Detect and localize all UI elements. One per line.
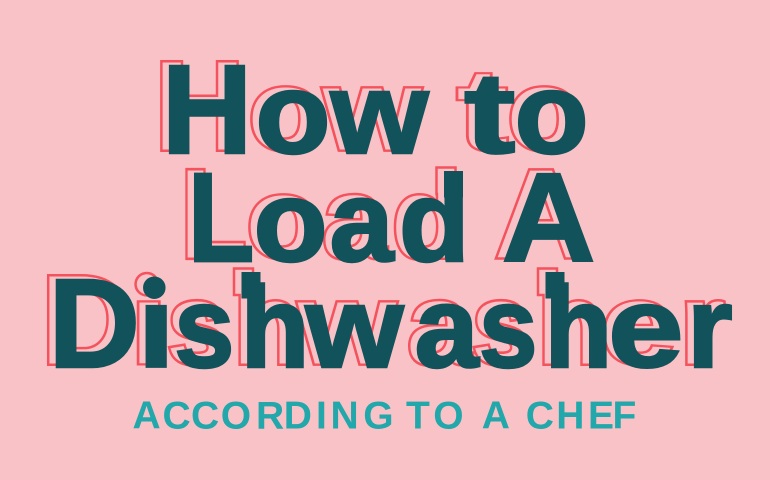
title outline shadow: h [537,259,605,388]
title: i [138,262,175,392]
title outline shadow: L [180,143,247,284]
title: h [544,263,612,391]
title: w [304,263,405,392]
title outline shadow: d [392,155,462,282]
title outline shadow: H [154,35,245,176]
title outline shadow: a [407,260,472,388]
title outline shadow: w [297,259,397,388]
infographic canvas [46,60,732,429]
title outline shadow: A [494,145,588,285]
title: t [464,48,516,177]
title outline shadow: s [167,259,227,388]
title outline shadow: e [600,259,676,388]
title outline shadow: s [167,259,227,388]
title: L [188,146,254,288]
title: e [608,263,684,391]
title outline shadow: h [537,259,605,388]
title outline shadow: t [456,45,508,174]
title: o [254,158,328,286]
title: h [240,264,310,392]
title: A [502,148,595,288]
title outline shadow: o [507,46,581,175]
title outline shadow: t [456,45,508,174]
title outline shadow: w [297,259,397,388]
title: r [687,263,733,392]
title: D [48,253,140,394]
title: o [514,50,589,178]
subtitle: ACCORDING TO A CHEF [132,394,636,438]
title outline shadow: i [130,259,168,388]
title outline shadow: a [322,154,387,282]
title outline shadow: L [180,143,247,284]
title: s [174,263,234,391]
title outline shadow: A [494,145,588,285]
title: o [255,49,331,178]
title outline shadow: w [322,45,422,174]
title [56,64,732,370]
title outline shadow: h [233,260,302,388]
title outline shadow: a [407,260,472,388]
title outline shadow: a [322,154,387,282]
title outline shadow: s [472,260,530,388]
title: w [329,49,430,178]
title outline shadow [46,60,726,369]
title outline shadow: o [248,46,323,174]
title outline shadow: w [322,45,422,174]
title outline shadow: o [246,154,320,283]
title outline shadow: o [507,46,581,175]
title outline shadow: r [680,259,725,388]
title: a [330,158,395,286]
title outline shadow: o [248,46,323,174]
title outline shadow: i [130,259,168,388]
title outline shadow: D [41,250,132,390]
title: H [162,38,252,180]
title outline shadow: r [680,259,725,388]
title: s [479,263,537,392]
title outline shadow: o [246,154,320,283]
title outline shadow: H [154,35,245,176]
title outline shadow: s [472,260,530,388]
title outline shadow: h [233,260,302,388]
title outline shadow: e [600,259,676,388]
title: a [415,264,480,392]
title outline shadow: D [41,250,132,390]
title: d [399,158,470,286]
title outline shadow: d [392,155,462,282]
